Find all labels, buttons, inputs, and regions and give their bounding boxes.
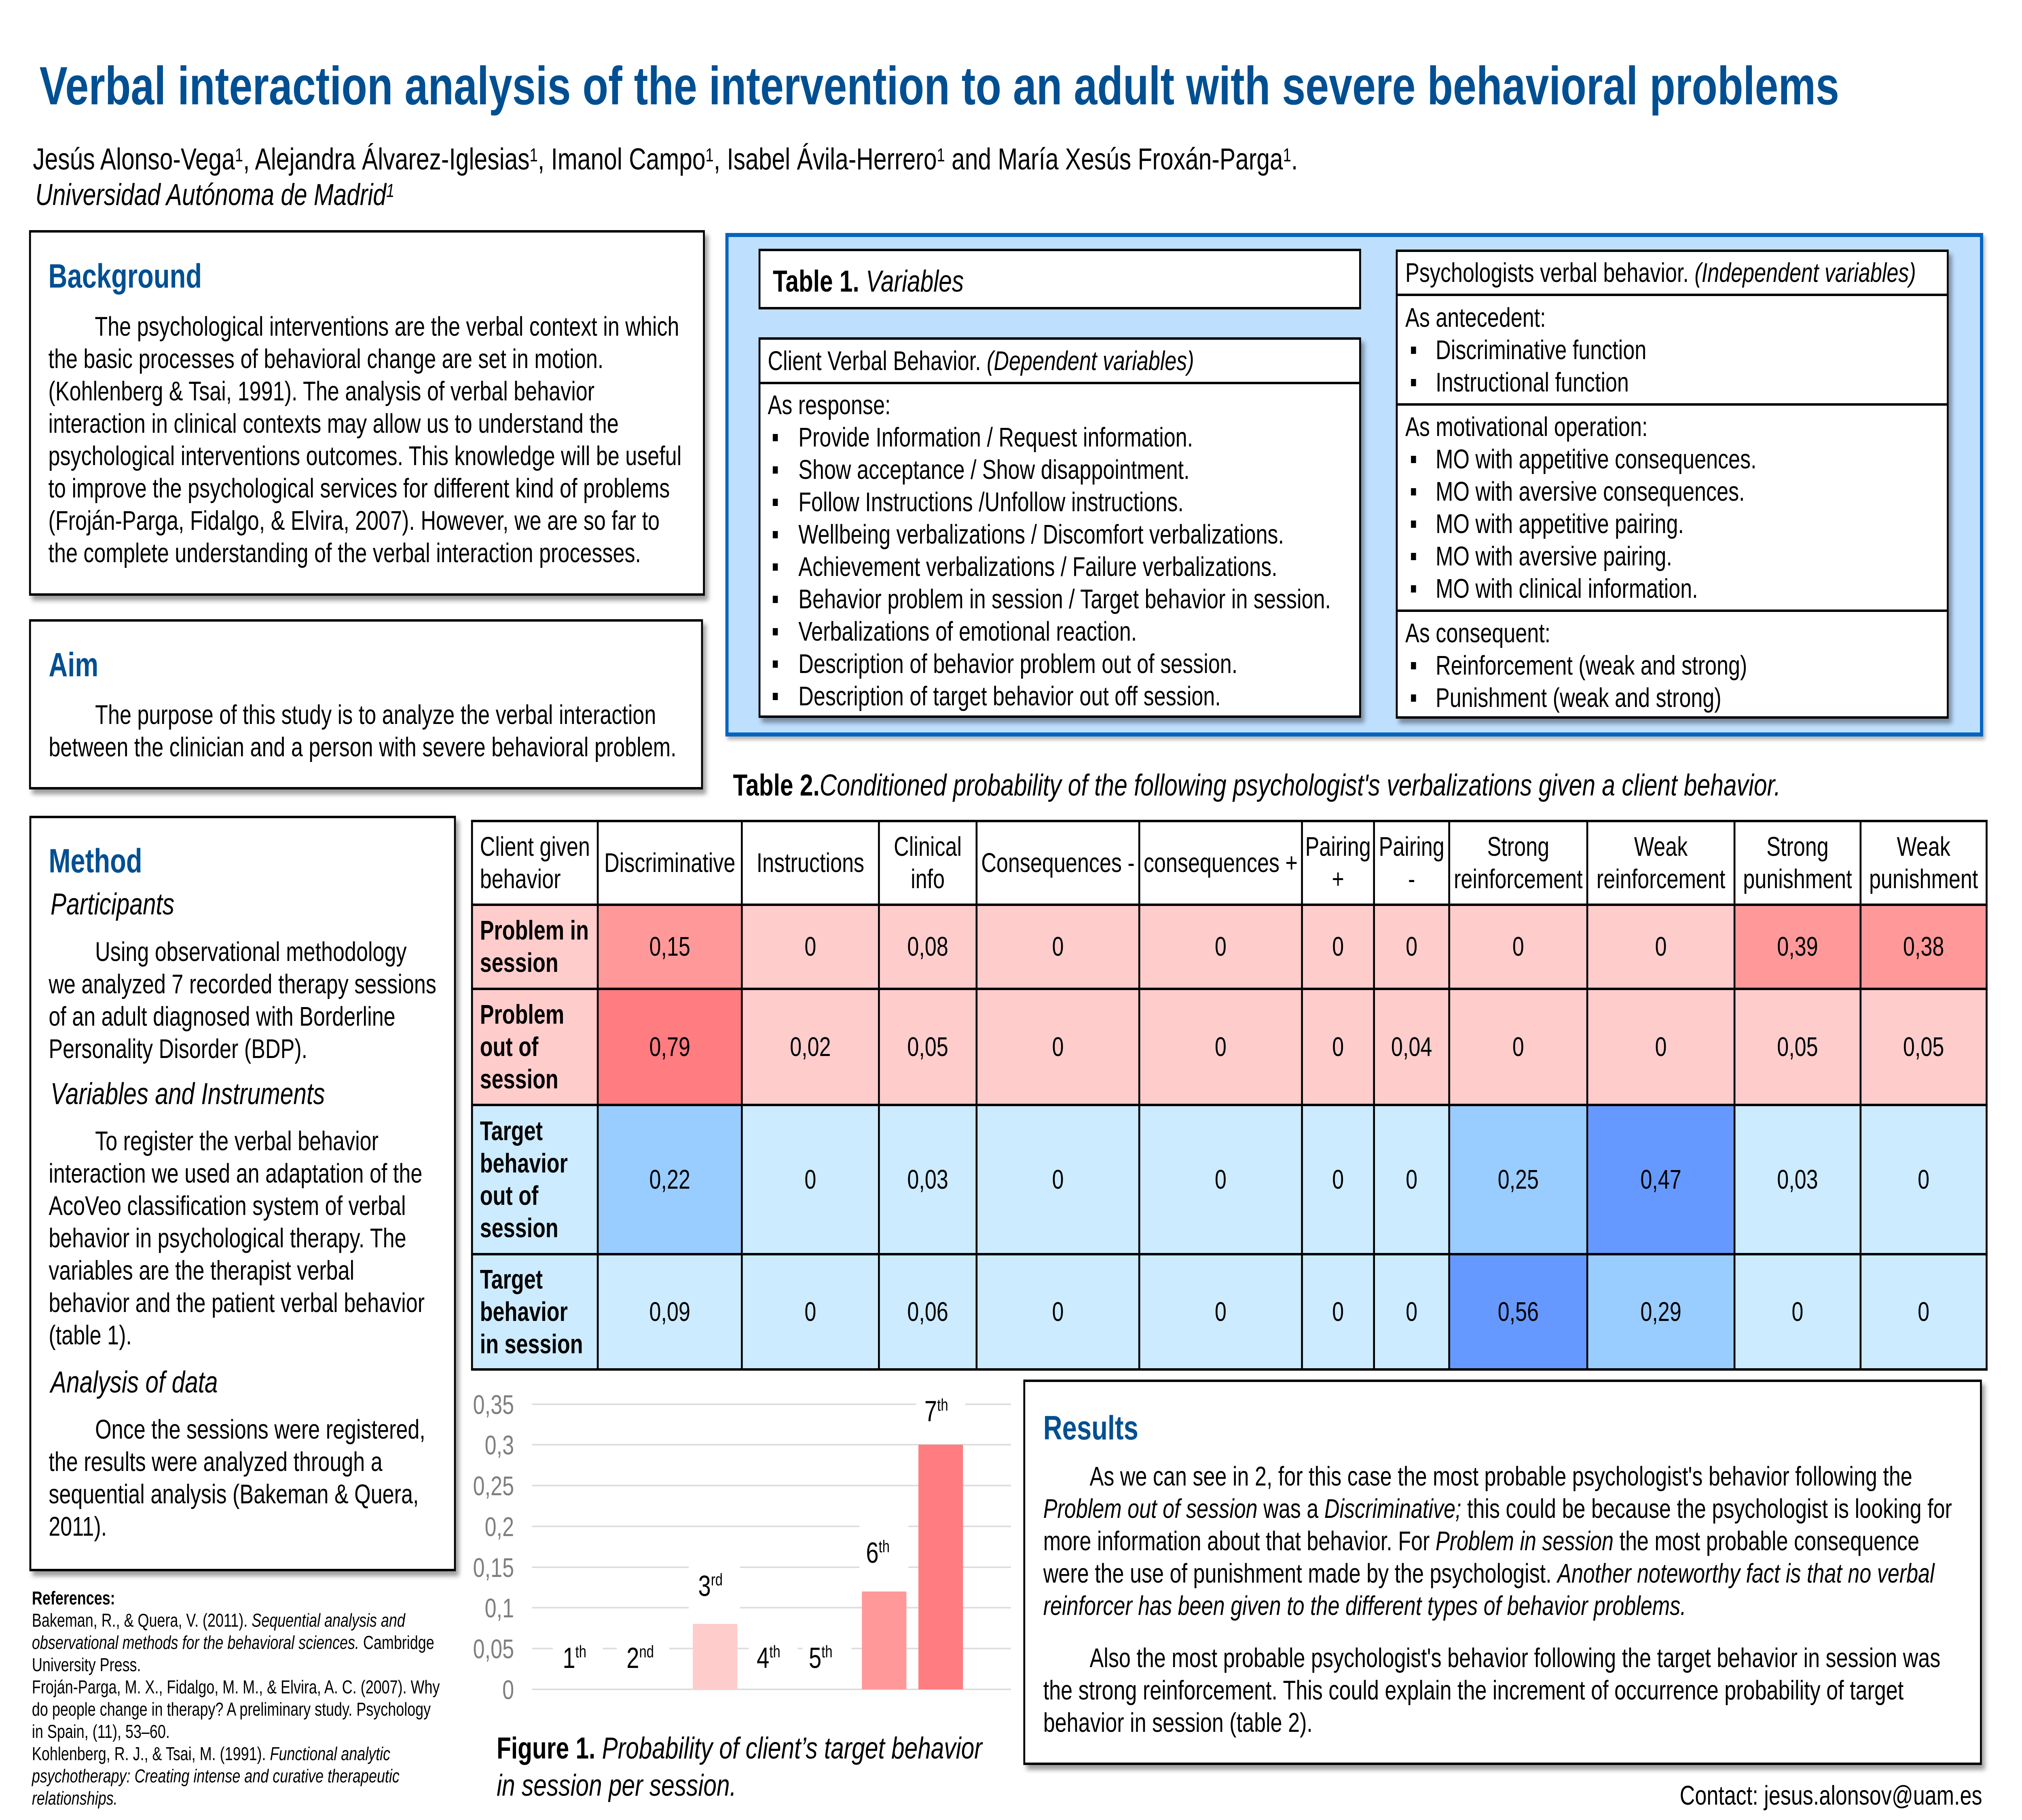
table 2: 0,03 [1777, 1165, 1818, 1195]
table 2: reinforcement [1597, 864, 1725, 894]
table 2: reinforcement [1454, 864, 1583, 894]
text: variables and instruments: AcoVeo classification system of verbal [49, 1191, 406, 1221]
table 2: 0 [1406, 1297, 1417, 1327]
session labels: 1 [563, 1642, 575, 1674]
table 2: session [480, 1064, 558, 1094]
table 2: 0 [804, 1297, 816, 1327]
figure 1 caption: Figure 1. Probability of client’s target behavior [497, 1731, 982, 1765]
table 2: session [480, 1213, 558, 1243]
session labels: 5 [809, 1642, 821, 1674]
y axis labels: 0,35 [473, 1390, 514, 1420]
as motivational operation: MO with clinical information. [1436, 574, 1698, 604]
y axis labels: 0,3 [485, 1430, 514, 1460]
figure 1 caption [497, 1729, 982, 1804]
y axis labels: 0,15 [473, 1553, 514, 1583]
session labels: 7 [924, 1395, 937, 1428]
table 2: 0 [1332, 1032, 1344, 1062]
text: results paragraph 1: reinforcer has been given to the different types of behavior problems. [1043, 1591, 1686, 1621]
table 2: 0,03 [907, 1165, 948, 1195]
text: variables and instruments: behavior in psychological therapy. The [49, 1223, 406, 1253]
as consequent: As consequent: [1405, 618, 1550, 648]
y axis labels: 0 [502, 1675, 514, 1705]
table 2: 0,05 [1777, 1032, 1818, 1062]
table 2: 0 [1655, 1032, 1667, 1062]
session labels [553, 1391, 965, 1674]
table 2: Weak [1634, 832, 1688, 861]
table 2: 0 [1052, 1032, 1064, 1062]
text: analysis of data: the results were analyzed through a [49, 1447, 383, 1477]
text: results paragraph 2: behavior in session (table 2). [1043, 1708, 1313, 1738]
table 2: punishment [1743, 864, 1852, 894]
as antecedent: Discriminative function [1436, 335, 1646, 365]
text: participants: Using observational methodology [95, 937, 407, 967]
as motivational operation: MO with aversive pairing. [1436, 542, 1672, 571]
table 2: 0 [1215, 932, 1227, 962]
references: Froján-Parga, M. X., Fidalgo, M. M., & Elvira, A. C. (2007). Why [32, 1676, 440, 1697]
table 2: 0 [1215, 1297, 1227, 1327]
text: analysis of data: sequential analysis (Bakeman & Quera, [49, 1479, 419, 1509]
client list [760, 389, 1359, 713]
table 2: 0,47 [1640, 1165, 1681, 1195]
as consequent: Punishment (weak and strong) [1436, 683, 1722, 713]
session labels: 3 [698, 1570, 711, 1602]
as motivational operation: MO with appetitive pairing. [1436, 509, 1684, 539]
session labels: th [821, 1642, 833, 1661]
table 2: out of [480, 1181, 538, 1211]
table 2: 0,06 [907, 1297, 948, 1327]
text: analysis of data: 2011). [49, 1512, 107, 1542]
y axis labels: 0,2 [485, 1512, 514, 1542]
table 2: 0,09 [649, 1297, 690, 1327]
references: in Spain, (11), 53–60. [32, 1721, 170, 1742]
text block: background [49, 311, 681, 569]
table 2: 0 [1332, 1165, 1344, 1195]
bar chart: figure 1 [455, 1383, 1024, 1707]
text: variables and instruments: variables are the therapist verbal [49, 1256, 354, 1286]
table 2: 0 [1512, 1032, 1524, 1062]
session labels: th [937, 1395, 948, 1414]
client list: Wellbeing verbalizations / Discomfort verbalizations. [798, 520, 1284, 550]
table 2: 0,22 [649, 1165, 690, 1195]
session labels: th [769, 1642, 780, 1661]
session labels: rd [711, 1570, 723, 1589]
table 2: + [1332, 864, 1344, 894]
table 2: session [480, 948, 558, 978]
table 2: 0,05 [907, 1032, 948, 1062]
table 2: 0 [1052, 1165, 1064, 1195]
session labels: th [575, 1642, 586, 1661]
as antecedent: As antecedent: [1405, 303, 1546, 333]
text: variables and instruments: (table 1). [49, 1321, 132, 1350]
subheading: analysis of data: Analysis of data [51, 1365, 218, 1399]
session labels: 4 [757, 1642, 769, 1674]
text block: background: The psychological interventions are the verbal context in which [95, 312, 679, 342]
y axis labels: 0,1 [485, 1593, 514, 1623]
table 2: Problem in [480, 916, 589, 946]
table 2: 0 [1791, 1297, 1803, 1327]
client list: Achievement verbalizations / Failure verbalizations. [798, 552, 1277, 582]
subheading: variables and instruments: Variables and Instruments [51, 1077, 325, 1111]
text: participants: we analyzed 7 recorded therapy sessions [49, 969, 436, 999]
references: observational methods for the behavioral sciences. Cambridge [32, 1632, 434, 1653]
heading: results: Results [1043, 1409, 1138, 1447]
panel: results [1023, 1380, 1982, 1765]
gridlines [532, 1404, 1011, 1689]
table 2: 0 [1052, 1297, 1064, 1327]
references: References: [32, 1587, 115, 1608]
table 2: Target [480, 1264, 543, 1294]
table 2: punishment [1869, 864, 1978, 894]
text: results paragraph 1: Problem out of session was a Discriminative; this could be because the psychologist is looking for [1043, 1494, 1952, 1524]
table 2: 0 [804, 1165, 816, 1195]
table 2: 0,39 [1777, 932, 1818, 962]
psychologists header: Psychologists verbal behavior. (Independent variables) [1405, 258, 1916, 288]
table 2: Strong [1487, 832, 1549, 861]
y axis labels: 0,25 [473, 1471, 514, 1501]
as motivational operation [1398, 411, 1947, 605]
heading: aim: Aim [49, 646, 98, 684]
table 2: in session [480, 1329, 583, 1359]
table 2: behavior [480, 1149, 568, 1179]
table 2 caption: Table 2.Conditioned probability of the following psychologist's verbalizations given a client behavior. [733, 768, 1781, 802]
text: analysis of data [49, 1414, 425, 1543]
text: results paragraph 1: more information about that behavior. For Problem in session the most probable consequence [1043, 1526, 1919, 1556]
table 2: info [911, 864, 945, 894]
text: variables and instruments [49, 1125, 425, 1352]
panel: client verbal behavior [759, 337, 1361, 718]
table 2: Discriminative [604, 848, 735, 878]
table 2: Target [480, 1116, 543, 1146]
table 2: 0 [1332, 932, 1344, 962]
client list: Follow Instructions /Unfollow instructions. [798, 487, 1184, 517]
text: results paragraph 2: the strong reinforcement. This could explain the increment of occurrence probability of target [1043, 1676, 1904, 1706]
panel: background [29, 230, 705, 596]
as antecedent [1398, 302, 1947, 399]
session labels: nd [639, 1642, 654, 1661]
as consequent [1398, 617, 1947, 714]
table 2: 0,05 [1903, 1032, 1944, 1062]
text block: background: (Kohlenberg & Tsai, 1991). The analysis of verbal behavior [49, 377, 594, 406]
text block: aim [49, 699, 677, 764]
text block: background: psychological interventions outcomes. This knowledge will be useful [49, 441, 681, 471]
text: variables and instruments: To register the verbal behavior [95, 1126, 379, 1156]
table 2: Problem [480, 1000, 564, 1030]
table 2: 0,38 [1903, 932, 1944, 962]
table 2: 0,04 [1391, 1032, 1432, 1062]
table 2: 0 [1406, 932, 1417, 962]
table 2: Pairing [1379, 832, 1445, 861]
text: analysis of data: Once the sessions were registered, [95, 1415, 425, 1445]
session labels: 2 [626, 1642, 639, 1674]
text block: background: the complete understanding of the verbal interaction processes. [49, 538, 641, 568]
table 2: Instructions [757, 848, 864, 878]
table 2: 0 [1052, 932, 1064, 962]
title: Verbal interaction analysis of the intervention to an adult with severe behavioral problems [40, 56, 1839, 116]
references [32, 1587, 440, 1809]
client list: Description of target behavior out off session. [798, 681, 1221, 711]
table 2: 0 [1918, 1165, 1929, 1195]
text: results paragraph 2: Also the most probable psychologist's behavior following the target behavior in session was [1090, 1643, 1940, 1673]
text: variables and instruments: behavior and the patient verbal behavior [49, 1288, 425, 1318]
as motivational operation: As motivational operation: [1405, 412, 1648, 442]
table 2: 0,29 [1640, 1297, 1681, 1327]
client list: Provide Information / Request information. [798, 423, 1193, 453]
as consequent: Reinforcement (weak and strong) [1436, 651, 1747, 681]
session labels: th [879, 1537, 890, 1556]
table 2: Clinical [894, 832, 962, 861]
table 2: Weak [1897, 832, 1950, 861]
table 2: 0 [1655, 932, 1667, 962]
table 2: Pairing [1305, 832, 1371, 861]
text block: background: (Froján-Parga, Fidalgo, & Elvira, 2007). However, we are so far to [49, 506, 660, 536]
panel: aim [29, 619, 703, 789]
table 2: 0 [804, 932, 816, 962]
affiliation: Universidad Autónoma de Madrid1 [36, 178, 394, 212]
client list: Show acceptance / Show disappointment. [798, 455, 1190, 485]
text: results paragraph 1 [1043, 1460, 1952, 1622]
subheading: participants: Participants [51, 887, 174, 921]
heading: method: Method [49, 842, 142, 880]
references: Kohlenberg, R. J., & Tsai, M. (1991). Functional analytic [32, 1743, 390, 1764]
table 1 title: Table 1. Variables [773, 264, 964, 298]
table 2: behavior [480, 1297, 568, 1327]
text: participants: Personality Disorder (BDP). [49, 1034, 307, 1064]
table 2: 0,08 [907, 932, 948, 962]
references: do people change in therapy? A preliminary study. Psychology [32, 1699, 431, 1720]
y axis labels: 0,05 [473, 1634, 514, 1664]
text block: background: interaction in clinical contexts may allow us to understand the [49, 409, 619, 439]
text: participants [49, 936, 436, 1065]
table 2: 0 [1215, 1032, 1227, 1062]
table 2: Strong [1766, 832, 1829, 861]
as motivational operation: MO with aversive consequences. [1436, 477, 1745, 507]
bars [693, 1445, 963, 1689]
table 1 heading [759, 249, 1361, 309]
table 2: 0,02 [790, 1032, 831, 1062]
contact: Contact: jesus.alonsov@uam.es [1680, 1781, 1982, 1811]
panel: table 1 variables [725, 233, 1983, 736]
authors: Jesús Alonso-Vega1, Alejandra Álvarez-Iglesias1, Imanol Campo1, Isabel Ávila-Herrero1 and María Xesús Froxán-Parga1. [33, 142, 1298, 176]
table 2: consequences + [1144, 848, 1298, 878]
table 2: 0,25 [1498, 1165, 1539, 1195]
client list: Behavior problem in session / Target behavior in session. [798, 584, 1331, 614]
panel: psychologists verbal behavior [1396, 250, 1949, 719]
table 2: 0 [1332, 1297, 1344, 1327]
session labels: 6 [866, 1536, 879, 1569]
table 2 [471, 820, 1988, 1371]
client list: Description of behavior problem out of session. [798, 649, 1237, 679]
as antecedent: Instructional function [1436, 368, 1629, 398]
table 2: - [1408, 864, 1415, 894]
client list: Verbalizations of emotional reaction. [798, 617, 1137, 647]
text: participants: of an adult diagnosed with Borderline [49, 1002, 396, 1032]
table 2: 0 [1918, 1297, 1929, 1327]
text: variables and instruments: interaction we used an adaptation of the [49, 1159, 422, 1189]
references: relationships. [32, 1788, 118, 1809]
y axis labels [473, 1390, 514, 1705]
table 2: 0 [1406, 1165, 1417, 1195]
references: psychotherapy: Creating intense and curative therapeutic [32, 1765, 400, 1786]
references: University Press. [32, 1654, 141, 1675]
figure 1 caption: in session per session. [497, 1768, 736, 1802]
text block: background: the basic processes of behavioral change are set in motion. [49, 344, 603, 374]
text block: aim: The purpose of this study is to analyze the verbal interaction [95, 700, 656, 730]
table 2: Consequences - [981, 848, 1135, 878]
text block: background: to improve the psychological services for different kind of problems [49, 474, 670, 504]
client list: As response: [768, 390, 891, 420]
client header: Client Verbal Behavior. (Dependent variables) [768, 346, 1194, 376]
table 2: 0 [1215, 1165, 1227, 1195]
text: results paragraph 1: As we can see in 2, for this case the most probable psychologist's behavior following the [1090, 1462, 1912, 1492]
table 2: 0 [1512, 932, 1524, 962]
as motivational operation: MO with appetitive consequences. [1436, 444, 1757, 474]
panel: method [30, 816, 456, 1571]
table 2: behavior [480, 864, 561, 894]
text block: aim: between the clinician and a person with severe behavioral problem. [49, 732, 677, 762]
text: results paragraph 1: were the use of punishment made by the psychologist. Another noteworthy fact is that no verbal [1043, 1559, 1935, 1589]
table 2: 0,79 [649, 1032, 690, 1062]
text: results paragraph 2 [1043, 1642, 1940, 1739]
heading: background: Background [49, 257, 202, 295]
table 2: Client given [480, 832, 590, 861]
table 2: 0,56 [1498, 1297, 1539, 1327]
references: Bakeman, R., & Quera, V. (2011). Sequential analysis and [32, 1610, 405, 1631]
table 2: out of [480, 1032, 538, 1062]
table 2: 0,15 [649, 932, 690, 962]
